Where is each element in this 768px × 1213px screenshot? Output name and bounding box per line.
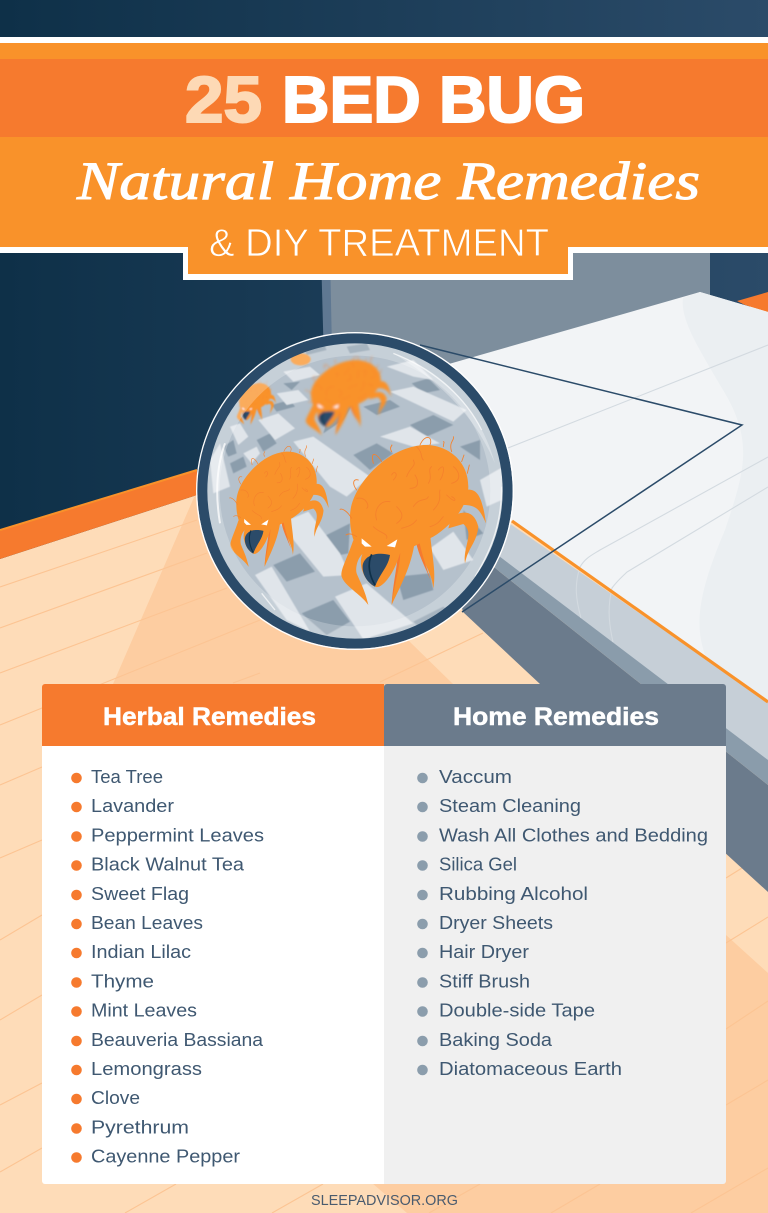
bug: small front [229,446,329,567]
panel: remedies table [42,684,726,1184]
subtitle: & DIY TREATMENT: & DIY TREATMENT [209,222,549,265]
list: herbal remedies: Pyrethrum [91,1116,189,1138]
list: herbal remedies: Thyme [91,970,154,992]
list: home remedies: Diatomaceous Earth [439,1058,622,1079]
list: herbal remedies: Lavander [91,795,174,816]
illustration: bedroom scene [0,253,768,1213]
list: herbal remedies: Clove [91,1087,140,1108]
bug: large front [340,437,486,605]
list: home remedies: Double-side Tape [439,1000,595,1020]
list: home remedies: Hair Dryer [439,941,529,962]
far bugs, blurred [305,356,391,435]
list: home remedies: Steam Cleaning [439,795,581,816]
title banner [0,43,768,280]
list: herbal remedies: Sweet Flag [91,883,189,904]
list: home remedies: Wash All Clothes and Bedding [439,824,708,846]
connector lines from lens to mattress [420,345,742,612]
bed base [440,520,768,892]
list: home remedies: Stiff Brush [439,970,530,992]
top navy band [0,0,768,37]
title: BED BUG: BED BUG [282,63,585,136]
heading: Home Remedies: Home Remedies [453,703,659,731]
list: herbal remedies: Mint Leaves [91,1000,197,1020]
list: herbal remedies: Indian Lilac [91,941,191,962]
list: herbal remedies: Lemongrass [91,1058,202,1079]
mattress top [400,292,768,702]
list: herbal remedies: Black Walnut Tea [91,854,245,874]
list: home remedies: Rubbing Alcohol [439,883,588,904]
list: home remedies: Baking Soda [439,1029,553,1050]
panel: home column [384,684,726,1184]
list: herbal remedies: Bean Leaves [91,912,203,933]
list: home remedies: Vaccum [439,766,512,787]
magnifying lens [197,333,513,650]
heading: Herbal Remedies: Herbal Remedies [103,703,316,731]
lens ring and highlights [197,333,513,649]
panel: herbal column [42,684,384,1184]
list: herbal remedies: Cayenne Pepper [91,1146,240,1166]
subtitle: Natural Home Remedies: Natural Home Remedies [76,151,700,211]
footer source: SLEEPADVISOR.ORG [311,1192,458,1209]
headboard [330,253,710,400]
list: herbal remedies: Peppermint Leaves [91,824,264,846]
list: herbal remedies: Beauveria Bassiana [91,1029,264,1050]
list: home remedies [417,766,708,1079]
title: 25: 25 [185,63,262,136]
list: herbal remedies: Tea Tree [91,766,163,787]
list: home remedies: Silica Gel [439,854,517,874]
list: home remedies: Dryer Sheets [439,912,553,933]
floor [0,300,768,1213]
baseboard [0,470,197,559]
woven fabric [210,343,503,639]
white banner border with tab [0,37,768,43]
list: herbal remedies [71,766,264,1166]
